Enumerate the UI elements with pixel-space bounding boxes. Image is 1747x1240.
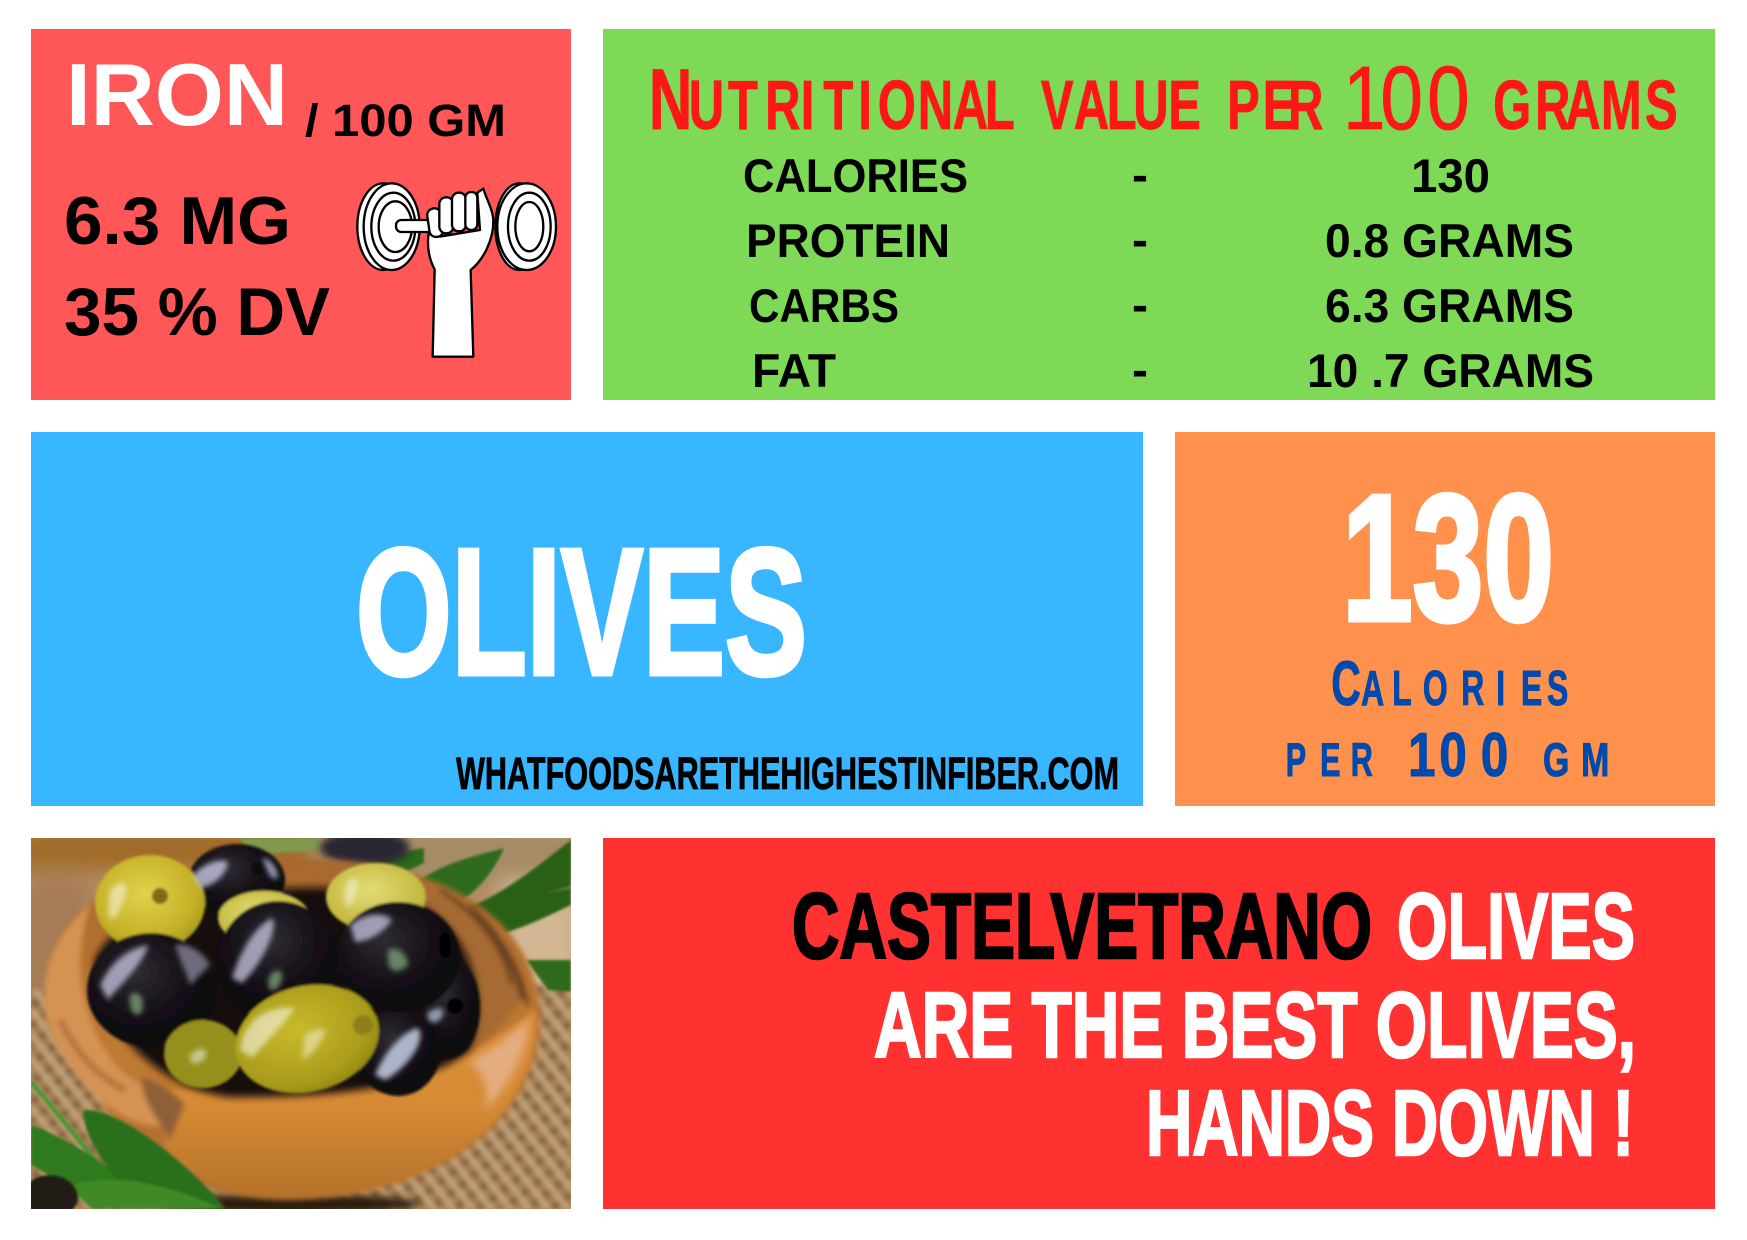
text: calories: C	[1331, 649, 1361, 719]
panel: iron	[31, 29, 571, 400]
heading: nutritional value per 100 grams: PER	[1227, 65, 1323, 144]
bowl highlight	[470, 1020, 528, 1110]
heading: iron: IRON	[66, 45, 288, 144]
olives	[87, 844, 480, 1108]
row: protein: PROTEIN	[746, 214, 950, 267]
text: per 100 gm: PER	[1286, 734, 1373, 787]
wooden bowl	[44, 858, 540, 1200]
heading: nutritional value per 100 grams	[649, 47, 1678, 148]
panel: olives title	[31, 432, 1143, 806]
foreground leaves	[22, 1082, 226, 1219]
row: carbs	[749, 278, 1574, 332]
heading: nutritional value per 100 grams: GRAMS	[1493, 65, 1678, 144]
dark olive in background	[315, 838, 416, 866]
olive leaves	[240, 838, 571, 992]
row: calories: -	[1132, 148, 1148, 201]
row: calories: CALORIES	[743, 149, 968, 202]
olive highlights	[100, 858, 443, 1080]
heading: nutritional value per 100 grams: VALUE	[1041, 65, 1201, 144]
row: calories: 130	[1411, 149, 1490, 202]
text: per 100 gm: GM	[1543, 734, 1609, 786]
burlap cloth	[31, 985, 571, 1209]
heading: nutritional value per 100 grams: N	[649, 51, 692, 148]
row: fat: FAT	[752, 344, 836, 397]
image: bowl of olives	[20, 830, 580, 1219]
text: calories: ALORIES	[1361, 661, 1568, 716]
text: olives: OLIVES	[1397, 874, 1635, 978]
photo background	[20, 830, 580, 1010]
text: castelvetrano: CASTELVETRANO	[792, 874, 1372, 978]
row: protein	[746, 213, 1574, 267]
bowl shadow	[160, 1194, 420, 1214]
row: fat: -	[1132, 343, 1148, 396]
row: protein: 0.8 GRAMS	[1325, 214, 1574, 267]
text: website: WHATFOODSARETHEHIGHESTINFIBER.COM	[456, 748, 1119, 799]
text: per 100 gm	[1286, 720, 1609, 789]
row: carbs: 6.3 GRAMS	[1325, 279, 1574, 332]
row: carbs: CARBS	[749, 279, 899, 332]
row: fat	[752, 343, 1594, 397]
heading: nutritional value per 100 grams: UTRITIONAL	[689, 65, 1015, 144]
panel: castelvetrano callout	[603, 838, 1715, 1209]
panel: nutritional value	[603, 29, 1715, 400]
text: 6.3 mg: 6.3 MG	[64, 183, 291, 259]
row: carbs: -	[1132, 278, 1148, 331]
heading: olives: OLIVES	[356, 512, 807, 713]
text: per 100 gm: / 100 GM	[305, 95, 506, 146]
text: per 100 gm: 100	[1408, 720, 1508, 789]
row: protein: -	[1132, 213, 1148, 266]
number: 130: 130	[1342, 458, 1554, 659]
panel: calories	[1175, 432, 1715, 806]
icon: hand lifting dumbbell	[357, 183, 556, 357]
text: 35 % DV: 35 % DV	[64, 274, 330, 350]
heading: nutritional value per 100 grams: 100	[1343, 47, 1470, 148]
row: calories	[743, 148, 1490, 202]
row: fat: 10 .7 GRAMS	[1307, 344, 1594, 397]
bowl interior	[95, 888, 477, 1097]
